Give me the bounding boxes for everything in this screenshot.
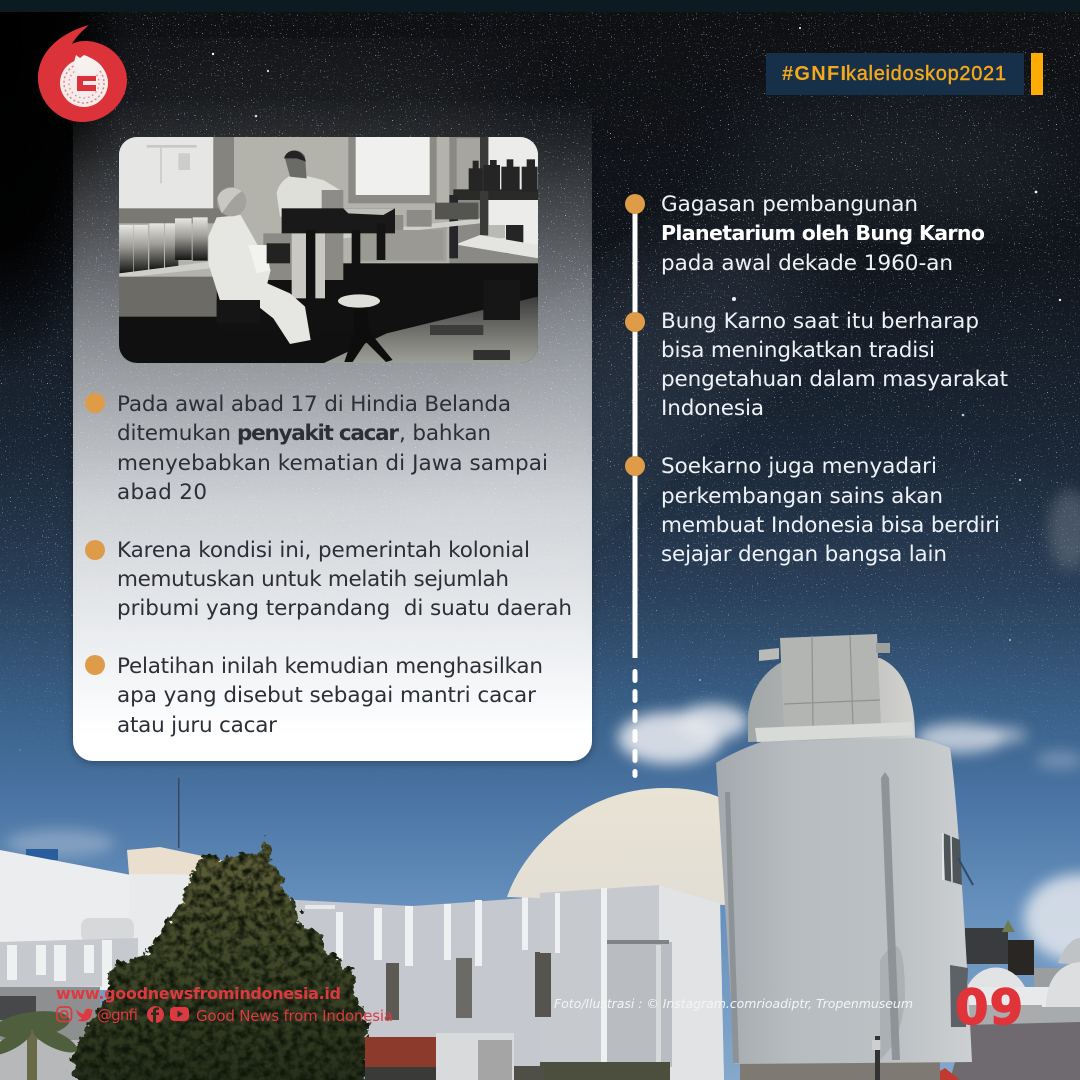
background photo: clouds — [5, 490, 1080, 962]
photo: stool — [338, 294, 393, 362]
timeline item 2: Indonesia — [661, 396, 764, 421]
footer: website and social handles: @gnfi — [97, 1006, 138, 1024]
timeline item 3: perkembangan sains akan — [661, 484, 943, 509]
background photo: green tree — [71, 838, 369, 1080]
timeline item 1: pada awal dekade 1960-an — [661, 251, 953, 276]
icon: youtube — [170, 1007, 189, 1021]
icon: twitter — [76, 1009, 93, 1021]
bullet 1: penyakit cacar — [237, 421, 399, 446]
icon: instagram — [57, 1007, 72, 1022]
background photo: palm tree — [0, 1007, 80, 1080]
bullet 1: Pada awal abad 17 di Hindia Belanda — [117, 392, 511, 417]
bullet 1 — [85, 392, 548, 505]
bullet 3: apa yang disebut sebagai mantri cacar — [117, 683, 536, 708]
timeline item 3: Soekarno juga menyadari — [661, 454, 937, 479]
panel: left text panel — [73, 95, 592, 761]
background photo: front building block — [540, 885, 724, 1080]
bullet 1: abad 20 — [117, 480, 207, 505]
bullet 3: Pelatihan inilah kemudian menghasilkan — [117, 654, 543, 679]
timeline: right column — [625, 192, 1008, 778]
timeline item 3 — [625, 454, 1000, 567]
timeline item 1 — [625, 192, 985, 276]
background photo: observatory tower — [716, 731, 973, 1080]
photo: laboratory black and white — [117, 135, 541, 365]
background photo: right side domes and buildings — [925, 920, 1080, 1080]
logo: GNFI red comma with garuda G — [38, 25, 127, 122]
footer: website and social handles — [56, 984, 393, 1025]
timeline item 1: Gagasan pembangunan — [661, 192, 918, 217]
bullet 2: memutuskan untuk melatih sejumlah — [117, 567, 509, 592]
bullet 2 — [85, 538, 572, 621]
bullet 3: atau juru cacar — [117, 713, 277, 738]
hashtag tag: #GNFI — [782, 63, 846, 85]
top-left dark vignette — [0, 12, 130, 392]
page number: 09 — [955, 980, 1023, 1036]
footer: website and social handles: www.goodnewsfromindonesia.id — [56, 984, 341, 1003]
photo: standing man — [277, 150, 343, 298]
background photo: planetarium dome — [507, 788, 725, 905]
background photo: curved facade — [231, 892, 551, 1068]
photo credit: Foto/Ilustrasi : © Instagram.comrioadiptr, Tropenmuseum — [554, 996, 913, 1011]
bullet 3 — [85, 654, 543, 738]
timeline item 2 — [625, 309, 1008, 421]
footer: website and social handles: Good News from Indonesia — [196, 1007, 393, 1025]
hashtag tag: kaleidoskop2021 — [846, 63, 1006, 85]
timeline item 2: bisa meningkatkan tradisi — [661, 338, 935, 363]
background photo: left white building — [0, 778, 231, 1080]
timeline item 2: pengetahuan dalam masyarakat — [661, 367, 1008, 392]
background photo: red roof and ac unit — [365, 1033, 544, 1080]
orange accent bar — [1031, 53, 1043, 95]
timeline item 3: membuat Indonesia bisa berdiri — [661, 513, 1000, 538]
bullet 2: Karena kondisi ini, pemerintah kolonial — [117, 538, 530, 563]
bullet 1: ditemukan — [117, 421, 231, 446]
background photo: observatory dome — [748, 634, 915, 742]
bullet 1: menyebabkan kematian di Jawa sampai — [117, 451, 548, 476]
timeline item 1: Planetarium oleh Bung Karno — [661, 221, 985, 245]
top dark strip — [0, 0, 1080, 12]
bullet 2: pribumi yang terpandang di suatu daerah — [117, 596, 572, 621]
timeline item 3: sejajar dengan bangsa lain — [661, 542, 947, 567]
bullet 1: , bahkan — [399, 421, 491, 446]
photo: seated man — [208, 187, 311, 344]
star field — [0, 12, 1080, 782]
bullet list: left panel — [85, 392, 572, 738]
hashtag tag — [766, 53, 1024, 95]
icon: facebook — [147, 1006, 164, 1023]
timeline item 2: Bung Karno saat itu berharap — [661, 309, 979, 334]
